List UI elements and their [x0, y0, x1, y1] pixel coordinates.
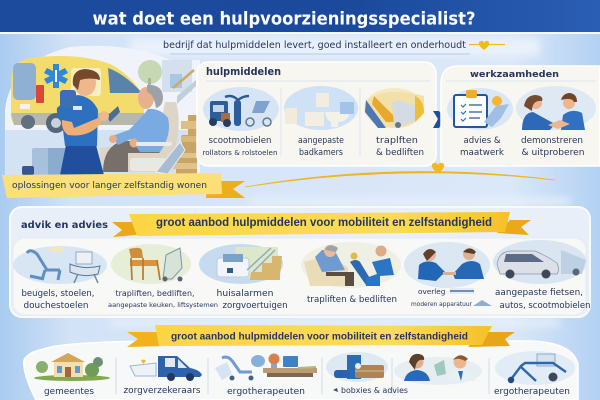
text: advies en maatwerk: advies &: [464, 136, 501, 146]
panel: werkzaamheden: [441, 66, 600, 166]
icon: ergotherapie hulpmiddelen: [215, 354, 317, 380]
illustration: stairlift visit: [5, 46, 200, 175]
text: traplift: traplften: [376, 136, 418, 146]
ribbon: oplossingen: oplossingen voor langer zelfstandig wonen: [12, 181, 207, 191]
icon: aangepaste badkamers: [284, 86, 358, 130]
icon: demonstreren: [516, 86, 596, 130]
icon: overleg: [404, 242, 490, 288]
text: overleg: [411, 287, 492, 308]
text: aangepaste badkamers: aangepaste: [298, 136, 344, 146]
text: boxies: bobxies & advies: [341, 386, 408, 395]
icon: auto: [493, 240, 587, 284]
text: zorgverzekeraars: zorgverzekeraars: [124, 386, 201, 396]
text: traplifen bedliften: trapliften, bedliften,: [116, 289, 194, 298]
subtitle: bedrijf dat hulpmiddelen levert, goed installeert en onderhoudt: [163, 40, 466, 51]
panel: advies: [10, 207, 590, 317]
panel: hulpmiddelen: & bedliften: [376, 148, 424, 158]
icon: zorgverzekeraars: [130, 356, 202, 381]
panel: advies: aangepaste keuken, liftsystemen: [108, 302, 218, 309]
panel: advies: autos, scootmobielen: [500, 301, 590, 311]
text: gemeentes: gemeentes: [44, 387, 95, 397]
text: ergotherapeuten: ergotherapeuten: [227, 387, 305, 397]
technician: [57, 69, 120, 175]
arrow: [433, 111, 445, 128]
elder on chair: [100, 85, 185, 174]
building and tree: [138, 60, 192, 92]
title banner: [0, 0, 600, 34]
text: aangepaste fietsen: aangepaste fietsen,: [495, 288, 583, 298]
heading: advik en advies: advik en advies: [21, 220, 108, 231]
icon: scooter: [495, 351, 575, 385]
panel: hulpmiddelen: badkamers: [299, 148, 344, 158]
heading: hulpmiddelen: hulpmiddelen: [206, 66, 281, 78]
icon: scootmobiel: [203, 87, 279, 131]
text: demonstreren: demonstreren: [521, 136, 583, 146]
text: traplift: trapliften & bedliften: [307, 295, 397, 305]
connector with heart: [245, 163, 555, 187]
panel: advies: douchestoelen: [24, 301, 88, 311]
stairs: [172, 70, 197, 175]
icon: stoelen en rollator: [111, 244, 191, 284]
panel: advies: zorgvoertuigen: [222, 301, 288, 311]
panel: werkzaamheden: & uitproberen: [522, 148, 584, 158]
icon: traplift overleg: [301, 242, 401, 288]
heading: werkzaamheden: werkzaamheden: [470, 70, 559, 80]
panel: werkzaamheden: maatwerk: [460, 148, 504, 158]
panel: hulpmiddelen: [197, 62, 436, 166]
ribbon: aanbod: groot aanbod hulpmiddelen voor mobiliteit en zelfstandigheid: [156, 217, 492, 229]
ribbon: aanbod 2: groot aanbod hulpmiddelen voor mobiliteit en zelfstandigheid: [171, 330, 468, 342]
panel: hulpmiddelen: rollators & rolstoelen: [202, 149, 278, 157]
icon: yellow van: [11, 56, 144, 133]
title banner: wat doet een hulpvoorzieningsspecialist?: [92, 8, 476, 30]
case: [22, 148, 66, 175]
icon: traplift: [364, 88, 424, 128]
icon: yellow heart line: [469, 41, 505, 50]
text: scootmobielen: scootmobielen: [208, 136, 272, 146]
icon: gemeente: [34, 353, 110, 381]
icon: checklist: [447, 88, 513, 130]
text: overleg: moderen apparatuur: [411, 302, 473, 308]
panel: partners: [24, 325, 578, 400]
ribbon: aanbod 2: [127, 325, 515, 347]
ribbon: oplossingen: [2, 173, 245, 198]
text: beugels: beugels, stoelen,: [22, 289, 94, 299]
icon: huisalarmen: [199, 244, 283, 284]
icon: beugels en stoelen: [13, 246, 107, 284]
text: ergotherapeuten 2: ergotherapeuten: [494, 387, 570, 397]
icon: small arrow mark: [333, 388, 338, 392]
text: huisalarmen: huisalarmen: [216, 289, 274, 299]
ribbon: aanbod: [112, 212, 531, 237]
icon: boxes: [326, 352, 388, 382]
text: overleg: overleg: [418, 287, 445, 296]
icon: zorgverleners: [394, 354, 482, 385]
